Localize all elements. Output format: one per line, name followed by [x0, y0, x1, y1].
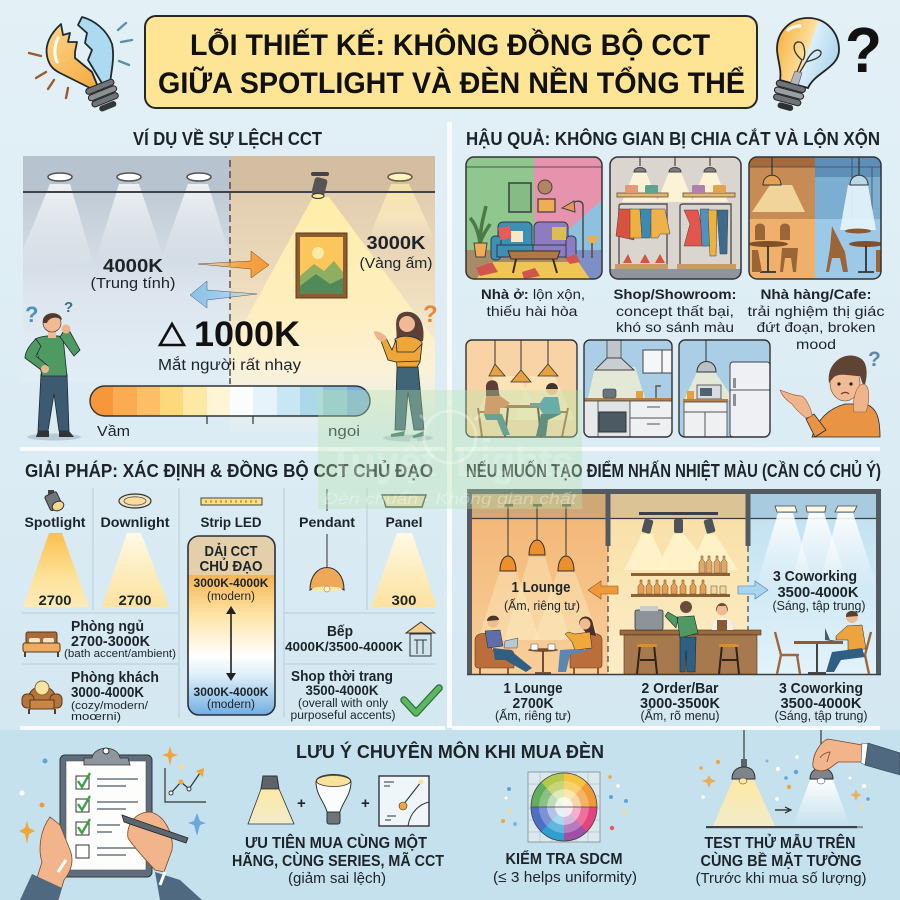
panel: solution [22, 460, 439, 723]
icon: broken bulb [29, 17, 132, 115]
title text: GIỮA SPOTLIGHT VÀ ĐÈN NỀN TỔNG THỂ [158, 66, 745, 100]
caption: coworking: 3500-4000K [780, 695, 862, 712]
figure: confused woman: ? [423, 301, 438, 328]
caption: shop: Shop/Showroom: [614, 286, 736, 302]
caption: bar: (Ấm, rõ menu) [640, 708, 720, 723]
watermark: Đèn chuẩn - Không gian chất [324, 490, 577, 508]
icon group: same brand series: + [297, 795, 306, 812]
column: panel: 300 [392, 592, 417, 608]
dominant CCT range box: (modern) [207, 699, 255, 711]
panel: buying notes [0, 726, 900, 900]
icon group: same brand series [248, 774, 429, 826]
dominant CCT range box: 3000K-4000K [194, 687, 269, 699]
zone: lounge lights [478, 504, 600, 640]
bar counter with people [620, 601, 761, 674]
caption: restaurant: mood [796, 336, 836, 352]
icon: question mark: ? [845, 14, 882, 86]
caption: restaurant: đứt đoạn, broken [756, 319, 876, 335]
heading: GIẢI PHÁP: XÁC ĐỊNH & ĐỒNG BỘ CCT CHỦ ĐẠO [25, 460, 433, 481]
text: same brand series: HÃNG, CÙNG SERIES, MÃ CCT [232, 852, 444, 870]
decorative sparkles [19, 746, 206, 844]
row: bedroom: Phòng ngủ [71, 619, 144, 635]
caption: home: thiếu hài hòa [486, 303, 578, 319]
caption: bar: 3000-3500K [640, 695, 720, 712]
row: living room: Phòng khách [71, 670, 159, 686]
row: fashion shop: 3500-4000K [306, 682, 378, 698]
watermark: Tuyệt [328, 438, 436, 485]
label: coworking in room: 3500-4000K [778, 584, 859, 601]
column: spotlight: 2700 [38, 592, 72, 608]
delta 1000K [158, 315, 301, 374]
figure: confused man [25, 299, 81, 440]
illustration: clipboard checklist with hands [20, 748, 202, 900]
zone: coworking lights [755, 506, 878, 590]
row: bedroom: (bath accent/ambient) [64, 648, 176, 660]
column: strip LED [200, 498, 262, 530]
delta 1000K: Mắt người rất nhạy [158, 357, 301, 374]
row: living room [22, 670, 159, 723]
text: test samples: (Trước khi mua số lượng) [696, 870, 867, 887]
header [29, 14, 882, 115]
label: coworking in room: 3 Coworking [773, 568, 857, 585]
row: fashion shop [290, 669, 439, 722]
icon: trend chart [165, 768, 206, 802]
label: 3000K: 3000K [366, 233, 426, 253]
label: lounge: 1 Lounge [512, 579, 570, 596]
arrow: to coworking [738, 581, 768, 599]
figure: confused woman [374, 301, 438, 442]
label: 3000K [360, 233, 433, 272]
column: strip LED: Strip LED [200, 514, 262, 530]
heading: LƯU Ý CHUYÊN MÔN KHI MUA ĐÈN [296, 741, 604, 762]
label: 3000K: (Vàng ấm) [360, 255, 433, 272]
column: pendant: Pendant [299, 514, 355, 530]
dominant CCT range box: DẢI CCT [204, 543, 258, 560]
card: dining pendants [466, 340, 577, 437]
watermark: Lights [456, 438, 574, 485]
caption: coworking [774, 680, 868, 723]
card: home living room [466, 157, 602, 280]
caption: shop [614, 286, 736, 335]
icon: SDCM color wheel [528, 772, 600, 842]
label: coworking in room: (Sáng, tập trung) [772, 599, 866, 613]
caption: home: Nhà ở: lộn xộn, [481, 286, 585, 302]
title text: LỖI THIẾT KẾ: KHÔNG ĐỒNG BỘ CCT [190, 28, 710, 62]
panel: intentional accents [466, 460, 881, 723]
arrow: warm to right [198, 251, 269, 278]
column: panel: Panel [386, 514, 422, 530]
illustration: test lamps on the wall [699, 730, 900, 828]
row: bedroom [23, 619, 176, 660]
text: test samples [696, 834, 867, 887]
dominant CCT range box: 3000K-4000K [194, 578, 269, 590]
title text [158, 28, 745, 100]
caption: shop: khó so sánh màu [616, 319, 734, 335]
coworking table and person [775, 611, 871, 674]
row: living room: (cozy/modern/ [71, 700, 149, 712]
row: living room: 3000-4000K [71, 685, 144, 701]
dominant CCT range box: CHỦ ĐẠO [200, 557, 263, 575]
caption: lounge: (Ấm, riêng tư) [495, 708, 571, 723]
dominant CCT range box: (modern) [207, 591, 255, 603]
row: fashion shop: (overall with only [298, 698, 388, 710]
zone: bar lights [624, 512, 738, 570]
watermark [318, 390, 582, 509]
color temperature bar: Vầm [97, 423, 130, 440]
panel: CCT mismatch example [23, 128, 438, 442]
caption: bar: 2 Order/Bar [642, 680, 719, 697]
column: spotlight: Spotlight [24, 514, 86, 530]
caption: shop: concept thất bại, [616, 303, 734, 319]
card: kitchen [584, 340, 672, 437]
heading: VÍ DỤ VỀ SỰ LỆCH CCT [133, 128, 322, 149]
caption: coworking: (Sáng, tập trung) [774, 709, 868, 723]
label: 4000K: (Trung tính) [90, 275, 176, 292]
text: SDCM: KIỂM TRA SDCM [506, 850, 622, 868]
text: test samples: TEST THỬ MẪU TRÊN [704, 834, 856, 852]
arrow: cool to left [190, 281, 257, 308]
column: panel [371, 495, 437, 608]
figure: worried man [780, 348, 881, 437]
card: kitchen with fridge [679, 340, 770, 437]
card: restaurant cafe [748, 157, 883, 279]
lounge seated people [475, 616, 602, 674]
caption: restaurant: Nhà hàng/Cafe: [760, 286, 872, 302]
figure: confused man: ? [64, 299, 73, 316]
title box [145, 16, 757, 108]
row: fashion shop: Shop thời trang [291, 669, 393, 685]
caption: lounge: 2700K [512, 695, 554, 712]
figure: confused man: ? [25, 302, 38, 327]
caption: home [481, 286, 585, 319]
column: downlight: Downlight [100, 514, 170, 530]
icon: half warm half cool bulb [770, 18, 839, 113]
label: coworking in room [772, 568, 866, 613]
column: downlight [100, 494, 170, 608]
color temperature bar [90, 386, 371, 440]
column: pendant [299, 489, 355, 592]
column: spotlight [23, 490, 89, 608]
label: lounge [504, 579, 580, 613]
card: shop showroom [610, 157, 741, 279]
dominant CCT range box [188, 536, 275, 715]
row: fashion shop: purposeful accents) [290, 710, 396, 722]
caption: lounge [495, 680, 571, 723]
label: 4000K: 4000K [103, 256, 163, 276]
caption: restaurant [748, 286, 884, 352]
row: bedroom: 2700-3000K [71, 634, 151, 650]
room scene [23, 156, 435, 432]
column: downlight: 2700 [118, 592, 152, 608]
text: SDCM: (≤ 3 helps uniformity) [493, 869, 637, 886]
row: kitchen: Bếp [327, 624, 353, 640]
caption: bar [640, 680, 720, 723]
caption: restaurant: trải nghiệm thị giác [748, 303, 884, 319]
row: living room: moœrni) [71, 711, 121, 723]
framed picture [296, 233, 347, 298]
heading: HẬU QUẢ: KHÔNG GIAN BỊ CHIA CẮT VÀ LỘN XỘN [466, 128, 880, 149]
text: SDCM [493, 850, 637, 886]
text: test samples: CÙNG BỀ MẶT TƯỜNG [700, 852, 862, 870]
delta 1000K: 1000K [194, 315, 300, 354]
text: same brand series [232, 834, 444, 887]
label: 4000K [90, 256, 176, 292]
text: same brand series: ƯU TIÊN MUA CÙNG MỘT [245, 834, 427, 852]
panel: consequences [466, 128, 884, 437]
arrow: to lounge [588, 581, 618, 599]
figure: worried man: ? [868, 348, 881, 371]
label: lounge: (Ấm, riêng tư) [504, 598, 580, 613]
row: kitchen: 4000K/3500-4000K [285, 639, 404, 654]
color temperature bar: ngoi [328, 423, 360, 440]
icon group: same brand series: + [361, 795, 370, 812]
row: kitchen [285, 622, 435, 656]
cross-section of three zones [467, 489, 881, 675]
caption: lounge: 1 Lounge [504, 680, 562, 697]
decorative dots around wheel [501, 775, 628, 830]
text: same brand series: (giảm sai lệch) [288, 870, 386, 887]
caption: coworking: 3 Coworking [779, 680, 863, 697]
bar shelves and bottles [631, 556, 730, 597]
